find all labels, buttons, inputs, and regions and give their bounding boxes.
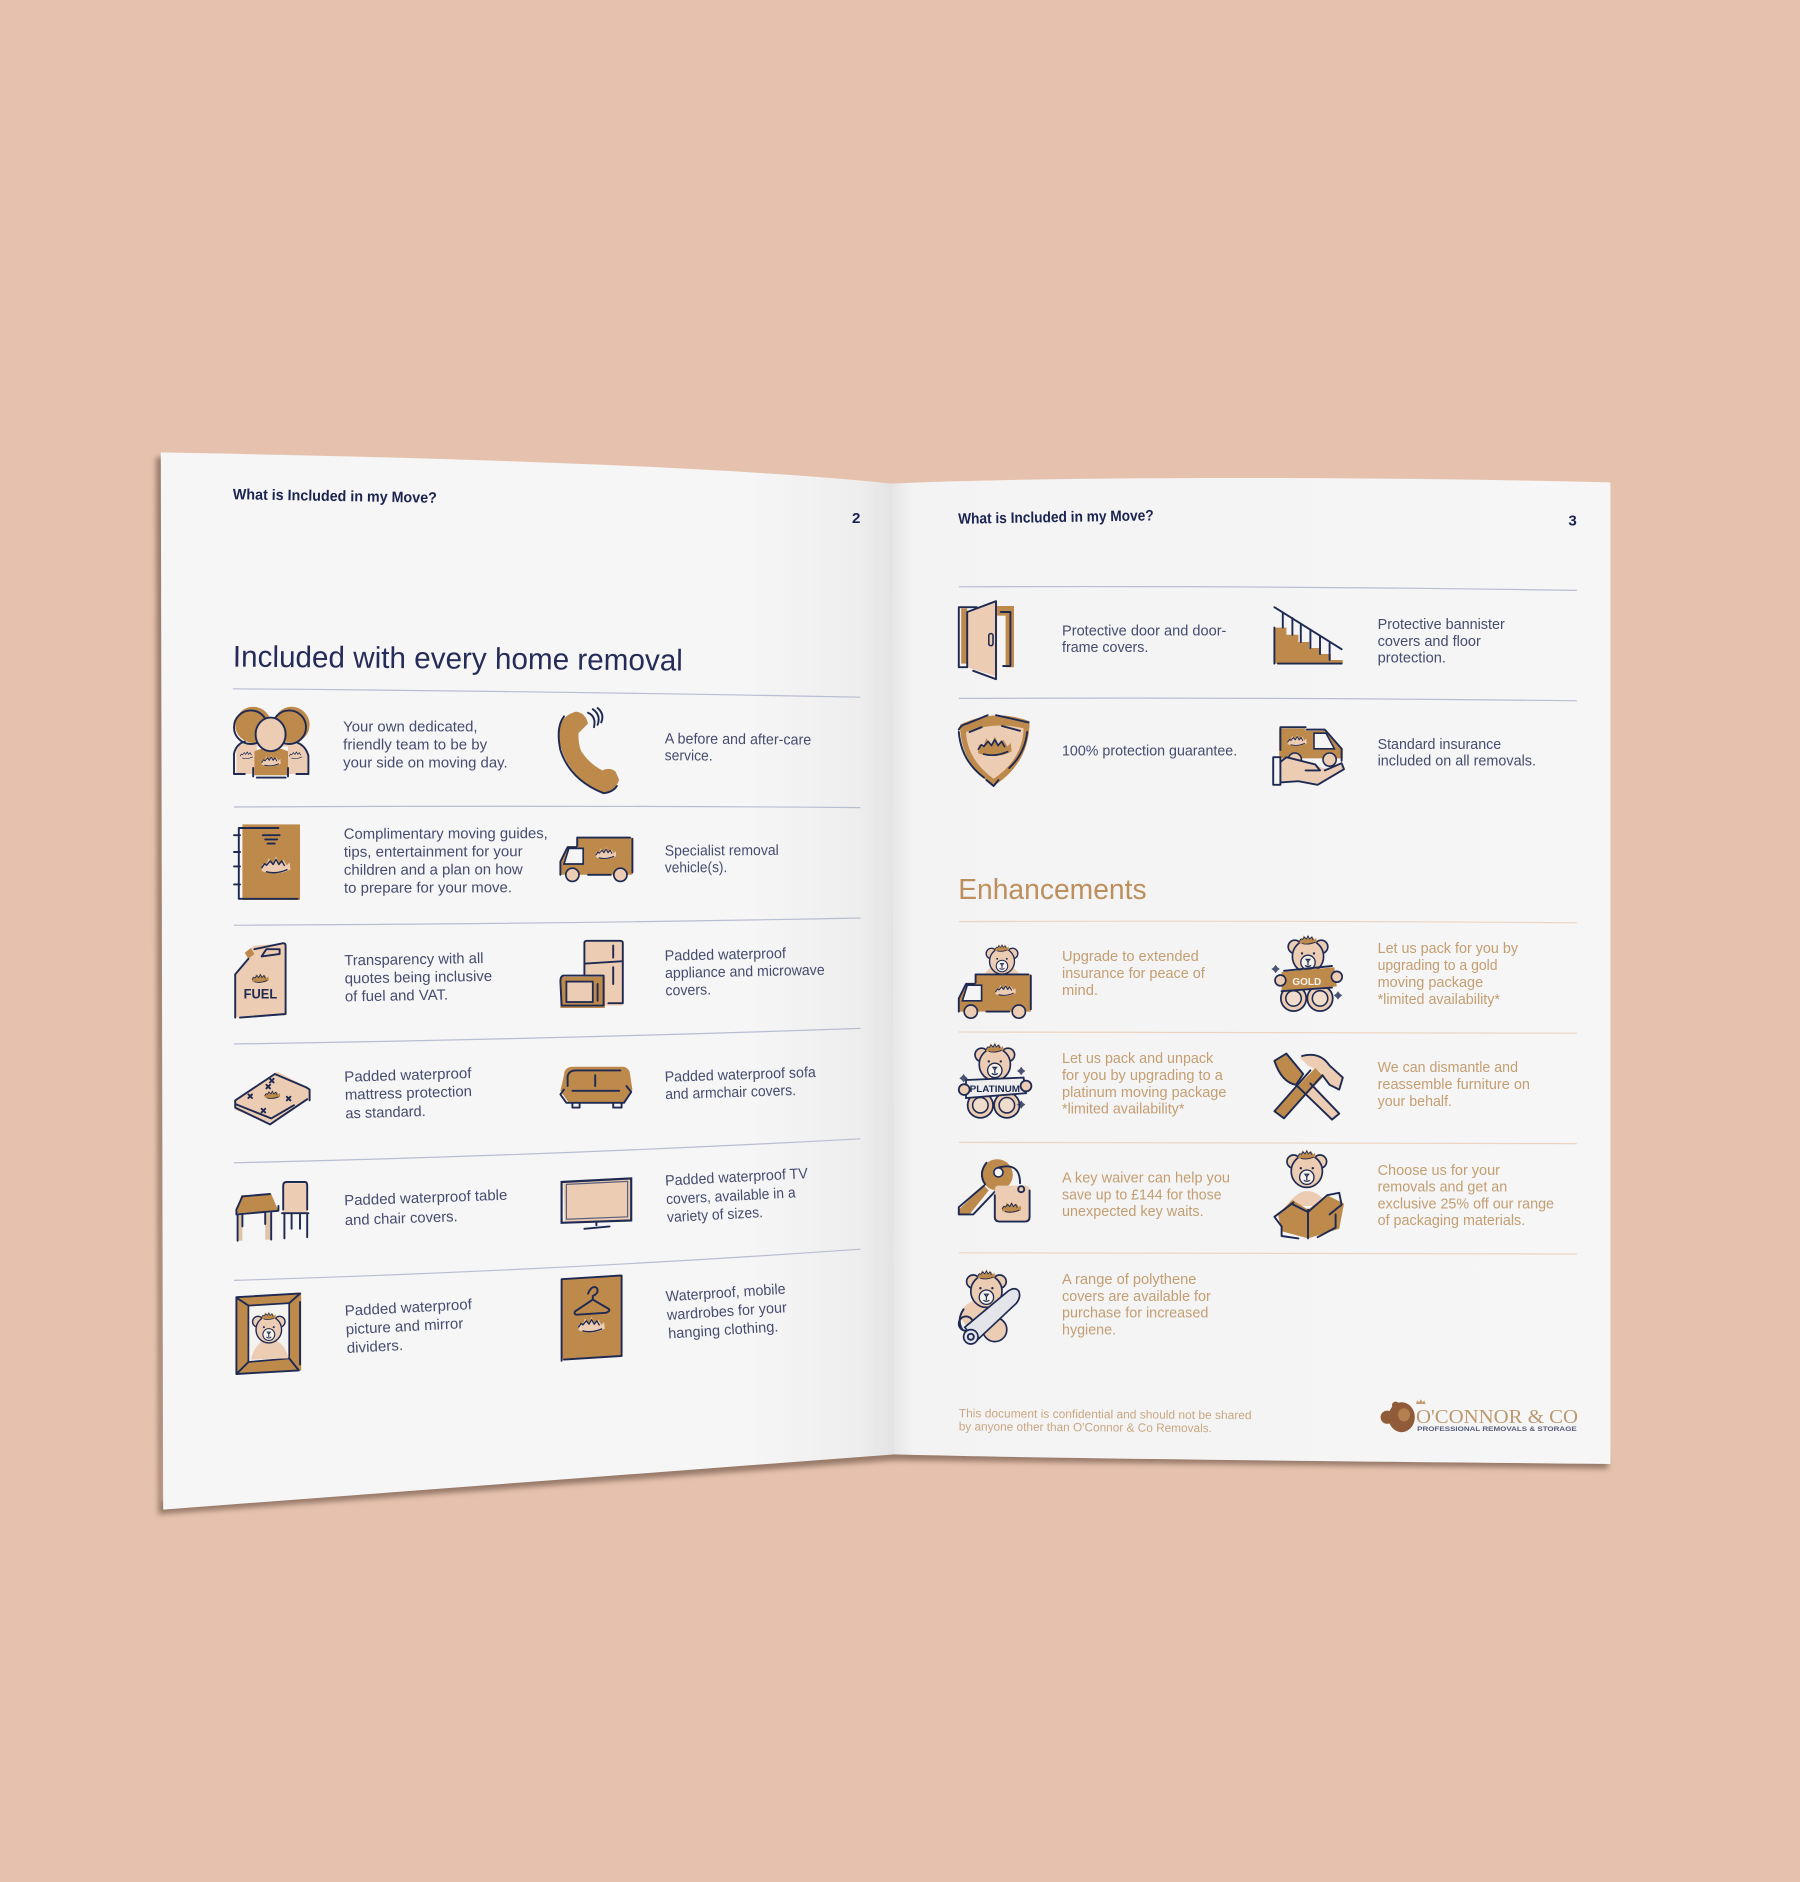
text: tv: variety of sizes. bbox=[667, 1205, 763, 1226]
footer note bbox=[959, 1406, 1252, 1435]
icon: team bbox=[234, 707, 310, 778]
icon: shield bbox=[959, 715, 1030, 786]
text: team: friendly team to be by bbox=[343, 737, 488, 753]
text: dismantle bbox=[1378, 1060, 1530, 1110]
logo bbox=[1381, 1399, 1578, 1433]
text: insurance: included on all removals. bbox=[1378, 754, 1536, 770]
text: guides: children and a plan on how bbox=[344, 862, 523, 879]
footer note: This document is confidential and should not be shared bbox=[959, 1406, 1252, 1422]
text: vehicles bbox=[665, 843, 779, 876]
right page dividers bbox=[959, 587, 1577, 1254]
icon: wardrobe bbox=[562, 1274, 622, 1361]
text: dismantle: your behalf. bbox=[1378, 1094, 1452, 1110]
text: team: your side on moving day. bbox=[343, 755, 508, 771]
text: gold package bbox=[1378, 941, 1519, 1008]
icon: sofa bbox=[560, 1067, 632, 1108]
icon: fuel can bbox=[235, 943, 286, 1018]
text: vehicles: Specialist removal bbox=[665, 843, 779, 860]
logo: O'CONNOR & CO bbox=[1416, 1406, 1578, 1428]
text: aftercare: service. bbox=[665, 748, 713, 765]
text: platinum package: *limited availability* bbox=[1062, 1102, 1185, 1118]
panel: left page bbox=[161, 452, 894, 1510]
text: gold package: upgrading to a gold bbox=[1378, 958, 1498, 974]
text: upgrade insurance: mind. bbox=[1062, 983, 1098, 999]
text: aftercare: A before and after-care bbox=[665, 731, 811, 749]
text: polythene: hygiene. bbox=[1062, 1322, 1116, 1338]
text: vehicles: vehicle(s). bbox=[665, 860, 727, 876]
text: key waiver bbox=[1062, 1171, 1230, 1220]
text: sofa: and armchair covers. bbox=[665, 1083, 796, 1103]
left page dividers bbox=[233, 689, 860, 1280]
text: bannister: protection. bbox=[1378, 650, 1446, 666]
text: fuel: quotes being inclusive bbox=[344, 969, 492, 987]
text: platinum package: for you by upgrading to a bbox=[1062, 1068, 1224, 1084]
text: dismantle: reassemble furniture on bbox=[1378, 1077, 1530, 1093]
icon: platinum bear: PLATINUM bbox=[970, 1084, 1020, 1095]
left page header: What is Included in my Move? bbox=[233, 486, 437, 507]
icon: hand holding van bbox=[1273, 727, 1344, 785]
text: gold package: *limited availability* bbox=[1378, 992, 1500, 1008]
text: fuel: of fuel and VAT. bbox=[345, 988, 448, 1005]
icon: key and tag bbox=[959, 1159, 1030, 1222]
text: upgrade insurance: insurance for peace of bbox=[1062, 966, 1206, 982]
text: team bbox=[343, 719, 508, 771]
text: packaging bbox=[1378, 1163, 1554, 1229]
text: polythene: covers are available for bbox=[1062, 1289, 1211, 1305]
panel: right page bbox=[892, 478, 1610, 1464]
heading: enhancements: Enhancements bbox=[958, 874, 1147, 906]
logo: PROFESSIONAL REMOVALS & STORAGE bbox=[1417, 1426, 1577, 1433]
text: wardrobes bbox=[664, 1282, 788, 1343]
text: sofa bbox=[664, 1065, 817, 1103]
text: packaging: removals and get an bbox=[1378, 1180, 1507, 1196]
text: upgrade insurance: Upgrade to extended bbox=[1062, 949, 1199, 965]
heading: included: Included with every home removal bbox=[233, 641, 683, 678]
footer note: by anyone other than O'Connor & Co Removals. bbox=[959, 1419, 1212, 1435]
text: aftercare bbox=[665, 731, 811, 765]
icon: notebook bbox=[234, 824, 300, 900]
icon: picture frame bbox=[236, 1292, 301, 1374]
text: mattress: as standard. bbox=[345, 1104, 426, 1122]
text: key waiver: A key waiver can help you bbox=[1062, 1171, 1230, 1187]
icon: removal van bbox=[560, 838, 632, 881]
right page header: What is Included in my Move? bbox=[958, 507, 1154, 528]
text: wardrobes: hanging clothing. bbox=[668, 1319, 779, 1343]
icon: tools bbox=[1274, 1054, 1343, 1120]
text: key waiver: unexpected key waits. bbox=[1062, 1204, 1204, 1220]
text: tv: Padded waterproof TV bbox=[665, 1166, 808, 1190]
text: platinum package: Let us pack and unpack bbox=[1062, 1051, 1214, 1067]
text: tv: covers, available in a bbox=[666, 1185, 797, 1208]
text: guides: to prepare for your move. bbox=[344, 880, 512, 897]
text: appliances: appliance and microwave bbox=[665, 963, 825, 982]
text: team: Your own dedicated, bbox=[343, 719, 478, 735]
text: fuel: Transparency with all bbox=[344, 951, 484, 969]
text: bannister bbox=[1378, 617, 1505, 666]
text: gold package: Let us pack for you by bbox=[1378, 941, 1519, 957]
text: guides: tips, entertainment for your bbox=[344, 844, 523, 861]
text: gold package: moving package bbox=[1378, 975, 1483, 991]
text: insurance bbox=[1378, 737, 1536, 770]
text: platinum package: platinum moving package bbox=[1062, 1085, 1226, 1101]
text: polythene bbox=[1062, 1272, 1211, 1338]
icon: bear on van bbox=[959, 944, 1031, 1018]
text: tv bbox=[665, 1166, 810, 1226]
icon: bear with polythene roll bbox=[959, 1269, 1020, 1344]
icon: bear in box bbox=[1274, 1149, 1344, 1238]
text: dismantle: We can dismantle and bbox=[1378, 1060, 1518, 1076]
page number 2: 2 bbox=[852, 510, 860, 527]
text: picture: Padded waterproof bbox=[344, 1297, 473, 1320]
icon: gold bear bbox=[1271, 934, 1342, 1011]
icon: fridge and microwave bbox=[560, 941, 623, 1008]
icon: gold bear: GOLD bbox=[1292, 977, 1321, 988]
icon: platinum bear bbox=[959, 1042, 1031, 1118]
text: guides: Complimentary moving guides, bbox=[344, 826, 548, 843]
text: table: Padded waterproof table bbox=[344, 1188, 508, 1209]
text: table: and chair covers. bbox=[345, 1209, 458, 1229]
text: key waiver: save up to £144 for those bbox=[1062, 1187, 1222, 1203]
text: picture bbox=[344, 1297, 475, 1357]
text: insurance: Standard insurance bbox=[1378, 737, 1501, 753]
text: mattress: Padded waterproof bbox=[344, 1066, 473, 1086]
text: appliances: covers. bbox=[665, 982, 711, 999]
text: appliances bbox=[665, 945, 825, 999]
text: table bbox=[344, 1188, 508, 1229]
text: polythene: A range of polythene bbox=[1062, 1272, 1196, 1288]
text: guides bbox=[344, 826, 548, 897]
text: picture: dividers. bbox=[346, 1338, 404, 1357]
text: mattress: mattress protection bbox=[345, 1084, 472, 1104]
icon: television bbox=[562, 1178, 632, 1229]
text: door: frame covers. bbox=[1062, 640, 1148, 656]
text: picture: picture and mirror bbox=[345, 1316, 464, 1338]
text: sofa: Padded waterproof sofa bbox=[664, 1065, 817, 1086]
text: mattress bbox=[344, 1066, 474, 1122]
text: upgrade insurance bbox=[1062, 949, 1206, 999]
icon: table and chair bbox=[236, 1182, 308, 1241]
text: packaging: Choose us for your bbox=[1378, 1163, 1500, 1179]
text: wardrobes: Waterproof, mobile bbox=[665, 1282, 786, 1305]
text: bannister: covers and floor bbox=[1378, 634, 1481, 650]
text: door bbox=[1062, 623, 1226, 656]
icon: mattress bbox=[235, 1072, 310, 1124]
icon: door bbox=[959, 601, 1014, 679]
icon: fuel can: FUEL bbox=[244, 986, 277, 1001]
text: appliances: Padded waterproof bbox=[665, 946, 787, 965]
text: bannister: Protective bannister bbox=[1378, 617, 1505, 633]
page shadows bbox=[156, 457, 1608, 1514]
text: guarantee: 100% protection guarantee. bbox=[1062, 743, 1237, 759]
text: fuel bbox=[344, 951, 493, 1005]
icon: telephone bbox=[559, 708, 619, 793]
text: polythene: purchase for increased bbox=[1062, 1306, 1208, 1322]
text: packaging: of packaging materials. bbox=[1378, 1213, 1525, 1229]
page number 3: 3 bbox=[1568, 513, 1577, 530]
icon: stairs bbox=[1274, 607, 1343, 664]
text: wardrobes: wardrobes for your bbox=[665, 1300, 787, 1324]
text: platinum package bbox=[1062, 1051, 1226, 1118]
text: packaging: exclusive 25% off our range bbox=[1378, 1196, 1554, 1212]
text: door: Protective door and door- bbox=[1062, 623, 1226, 639]
